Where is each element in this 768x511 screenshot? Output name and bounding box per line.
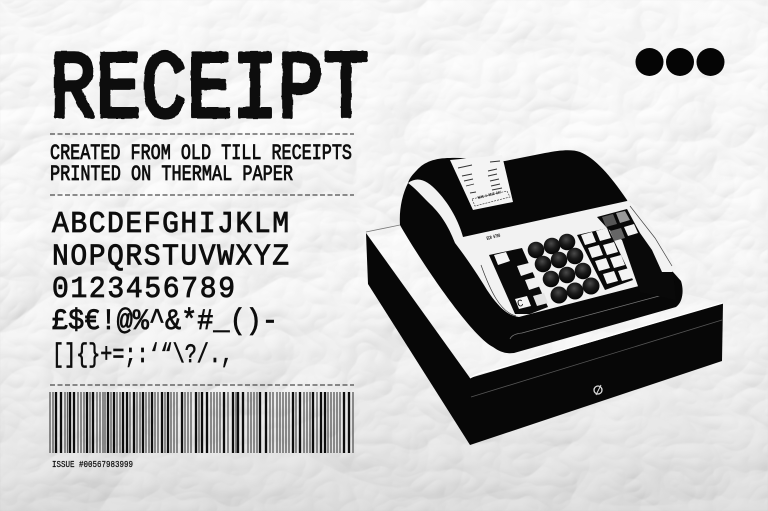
- divider: under title: [50, 133, 354, 135]
- receipt message: HAVE A NICE DAY: [478, 191, 502, 201]
- title: RECEIPT: [50, 38, 369, 145]
- clear key letter: C: [516, 299, 525, 311]
- machine front lip line: [510, 292, 674, 339]
- right panel outline: [630, 206, 672, 266]
- character set: £$€!@%^&*#_()-: [52, 306, 278, 338]
- divider: above barcode: [50, 384, 354, 386]
- machine body: [400, 150, 683, 353]
- character set: NOPQRSTUVWXYZ: [52, 240, 289, 274]
- number pad: round keys: [528, 234, 600, 304]
- function keys block: [577, 228, 633, 290]
- machine white trim and control panel: [408, 180, 677, 317]
- divider: under subtitle: [50, 194, 354, 196]
- model label: ECR 6700: [486, 233, 501, 242]
- character set: 0123456789: [52, 272, 235, 306]
- top right key block: [597, 209, 676, 300]
- subtitle: [50, 141, 352, 187]
- drawer: [366, 225, 723, 445]
- left panel outline: [481, 265, 516, 316]
- subtitle: CREATED FROM OLD TILL RECEIPTS: [50, 141, 352, 166]
- character set: [52, 207, 289, 370]
- barcode: [50, 392, 353, 453]
- subtitle: PRINTED ON THERMAL PAPER: [50, 162, 293, 187]
- left key block: [489, 248, 548, 314]
- character set: ABCDEFGHIJKLM: [52, 207, 289, 241]
- illustration: cash register: [366, 150, 723, 445]
- three dots: [636, 48, 724, 76]
- receipt paper: [450, 155, 513, 210]
- character set: []{}+=;:‘“\?/.,: [52, 339, 233, 370]
- drawer lock: [594, 385, 602, 395]
- issue number: ISSUE #00567983999: [52, 459, 133, 470]
